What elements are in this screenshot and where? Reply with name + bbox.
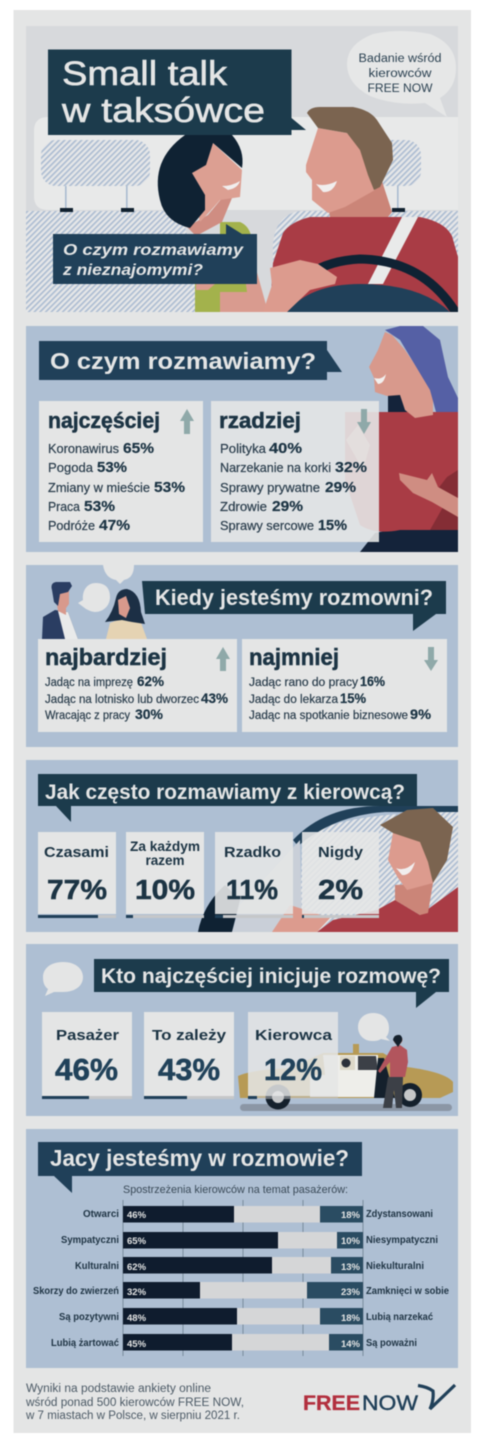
card: least: 15% (340, 691, 366, 706)
row: Skorzy do zwierzeń: 23% (341, 1287, 361, 1298)
woman illustration (345, 326, 458, 552)
subtitle bubble (53, 224, 257, 284)
footer note: wśród ponad 500 kierowców FREE NOW, (25, 1397, 244, 1409)
card: most: Wracając z pracy (45, 710, 130, 722)
card: least (242, 639, 447, 732)
card: least: Jadąc do lekarza (249, 694, 339, 706)
footer note (25, 1383, 244, 1422)
row: Otwarci: 18% (341, 1210, 361, 1221)
row: Sympatyczni: Sympatyczni (61, 1234, 119, 1246)
row: Lubią żartować: Są poważni (366, 1337, 417, 1349)
row: Skorzy do zwierzeń: Skorzy do zwierzeń (33, 1285, 119, 1297)
card: most: Jadąc na lotnisko lub dworzec (45, 694, 199, 706)
panel: what we are like (26, 1129, 458, 1368)
chart subtitle: Spostrzeżenia kierowców na temat pasażerów: (123, 1184, 348, 1196)
stat: passenger: 46% (55, 1052, 118, 1087)
stat: sometimes (38, 832, 116, 918)
card: most: Jadąc na imprezę (45, 677, 133, 689)
card: most often: Zmiany w mieście (48, 481, 150, 495)
row: Otwarci: 46% (127, 1210, 147, 1221)
card: least: Jadąc rano do pracy (249, 677, 358, 689)
card: most often (39, 401, 203, 542)
card: most often: Pogoda (48, 461, 93, 475)
row: Lubią żartować (51, 1334, 417, 1350)
stat: rarely: 11% (226, 874, 278, 905)
card: most often: 53% (84, 498, 115, 515)
card: most often: Koronawirus (48, 442, 119, 456)
row: Skorzy do zwierzeń: 32% (127, 1287, 147, 1298)
panel: topics (26, 326, 458, 552)
car seat background (34, 117, 458, 210)
panel: how often (26, 760, 458, 932)
card: least: 9% (410, 707, 431, 722)
card: less often (211, 401, 379, 542)
driver (263, 107, 458, 316)
seat hatch right (272, 210, 458, 260)
row: Sympatyczni: Niesympatyczni (366, 1234, 438, 1246)
row: Kulturalni: Niekulturalni (366, 1260, 424, 1272)
stat: sometimes: Czasami (44, 845, 109, 861)
stat: sometimes: 77% (47, 874, 107, 905)
people illustration (42, 565, 147, 639)
card: least: Jadąc na spotkanie biznesowe (249, 710, 408, 722)
card: less often: Sprawy prywatne (220, 481, 320, 495)
row: Otwarci: Otwarci (83, 1208, 119, 1220)
taxi illustration (238, 1044, 453, 1111)
stat: it depends: 43% (158, 1052, 220, 1087)
card: less often: 32% (335, 459, 367, 476)
row: Kulturalni: Kulturalni (75, 1260, 119, 1272)
stat: rarely (215, 832, 293, 918)
card: most (38, 639, 237, 732)
panel: when talkative (26, 565, 458, 747)
title bubble: Small talk (62, 55, 228, 93)
row: Są pozytywni: 18% (341, 1313, 361, 1324)
survey speech bubble (347, 31, 456, 117)
seat hatch left (26, 211, 195, 312)
title bubble: w taksówce (61, 92, 265, 130)
row: Skorzy do zwierzeń (33, 1282, 449, 1298)
subtitle bubble: z nieznajomymi? (62, 262, 204, 279)
panel: who initiates (26, 944, 458, 1116)
card: less often: 15% (318, 517, 347, 534)
card: most often: najczęściej (48, 408, 160, 433)
row: Lubią żartować: 45% (127, 1339, 147, 1350)
stat: driver: 12% (264, 1052, 322, 1087)
survey speech bubble: kierowców (368, 68, 432, 80)
card: least: 16% (360, 674, 385, 689)
heading: Kto najczęściej inicjuje rozmowę? (101, 964, 441, 988)
row: Sympatyczni: 65% (127, 1236, 147, 1247)
row: Są pozytywni (59, 1308, 433, 1324)
heading (39, 341, 342, 380)
card: most: 30% (135, 707, 163, 722)
stat: driver (248, 1012, 338, 1099)
heading (38, 1142, 362, 1193)
stat: never: Nigdy (318, 845, 363, 861)
footer note: w 7 miastach w Polsce, w sierpniu 2021 r. (25, 1410, 240, 1422)
card: most: 62% (137, 674, 164, 689)
diverging bar chart (33, 1200, 449, 1356)
headrest left (41, 140, 150, 212)
survey speech bubble: Badanie wśród (358, 53, 442, 65)
card: most often: 53% (97, 459, 127, 476)
logo: FREE NOW: FREE (303, 1391, 360, 1415)
row: Są pozytywni: Lubią narzekać (366, 1311, 433, 1323)
card: most often: 65% (123, 440, 154, 457)
heading (142, 581, 446, 631)
card: most often: Podróże (48, 519, 95, 533)
row: Lubią żartować: 14% (341, 1339, 361, 1350)
stat: passenger: Pasażer (56, 1027, 119, 1044)
row: Skorzy do zwierzeń: Zamknięci w sobie (366, 1285, 449, 1297)
survey speech bubble: FREE NOW (368, 83, 433, 95)
headrest right (382, 140, 422, 213)
heading (38, 774, 417, 822)
heading: Jak często rozmawiamy z kierowcą? (45, 781, 405, 804)
row: Sympatyczni (61, 1232, 438, 1248)
card: less often: 40% (269, 440, 302, 457)
stat: every time: razem (146, 853, 184, 868)
card: less often: 29% (272, 498, 303, 515)
stat: it depends: To zależy (152, 1027, 227, 1044)
row: Otwarci (83, 1206, 433, 1222)
card: most often: 47% (99, 517, 130, 534)
stat: every time (126, 832, 204, 918)
stat: rarely: Rzadko (224, 845, 281, 861)
row: Są pozytywni: 48% (127, 1313, 147, 1324)
row: Kulturalni: 13% (341, 1262, 361, 1273)
row: Kulturalni: 62% (127, 1262, 147, 1273)
driver illustration (198, 806, 458, 932)
subtitle bubble: O czym rozmawiamy (63, 242, 245, 259)
speech bubble icon (43, 962, 83, 996)
card: most: 43% (201, 691, 228, 706)
woman passenger (158, 135, 268, 312)
logo: FREE NOW (303, 1385, 455, 1415)
pedestrian with bubble (358, 1013, 408, 1108)
logo: FREE NOW: NOW (362, 1391, 419, 1415)
stat: every time: Za każdym (130, 839, 200, 854)
title bubble (48, 50, 306, 135)
footer note: Wyniki na podstawie ankiety online (26, 1383, 211, 1395)
card: less often: Sprawy sercowe (220, 519, 314, 533)
stat: it depends (144, 1012, 234, 1099)
row: Otwarci: Zdystansowani (366, 1208, 433, 1220)
stat: never (302, 832, 379, 918)
card: least: najmniej (249, 644, 339, 670)
card: most: najbardziej (45, 644, 167, 670)
card: less often: Polityka (220, 442, 266, 456)
card: most often: Praca (48, 500, 80, 514)
row: Sympatyczni: 10% (341, 1236, 361, 1247)
card: less often: Narzekanie na korki (220, 461, 331, 475)
card: less often: Zdrowie (220, 500, 267, 514)
stat: every time: 10% (135, 874, 195, 905)
stat: passenger (42, 1012, 132, 1099)
card: less often: rzadziej (219, 408, 301, 433)
heading: Jacy jesteśmy w rozmowie? (50, 1145, 349, 1171)
heading: Kiedy jesteśmy rozmowni? (155, 585, 433, 610)
row: Kulturalni (75, 1257, 424, 1274)
card: most often: 53% (154, 479, 185, 496)
card: less often: 29% (325, 479, 356, 496)
heading (94, 959, 449, 1008)
stat: driver: Kierowca (255, 1027, 333, 1044)
heading: O czym rozmawiamy? (50, 348, 316, 374)
row: Lubią żartować: Lubią żartować (51, 1337, 119, 1349)
row: Są pozytywni: Są pozytywni (59, 1311, 119, 1323)
panel: hero (26, 26, 458, 316)
stat: never: 2% (318, 874, 363, 905)
